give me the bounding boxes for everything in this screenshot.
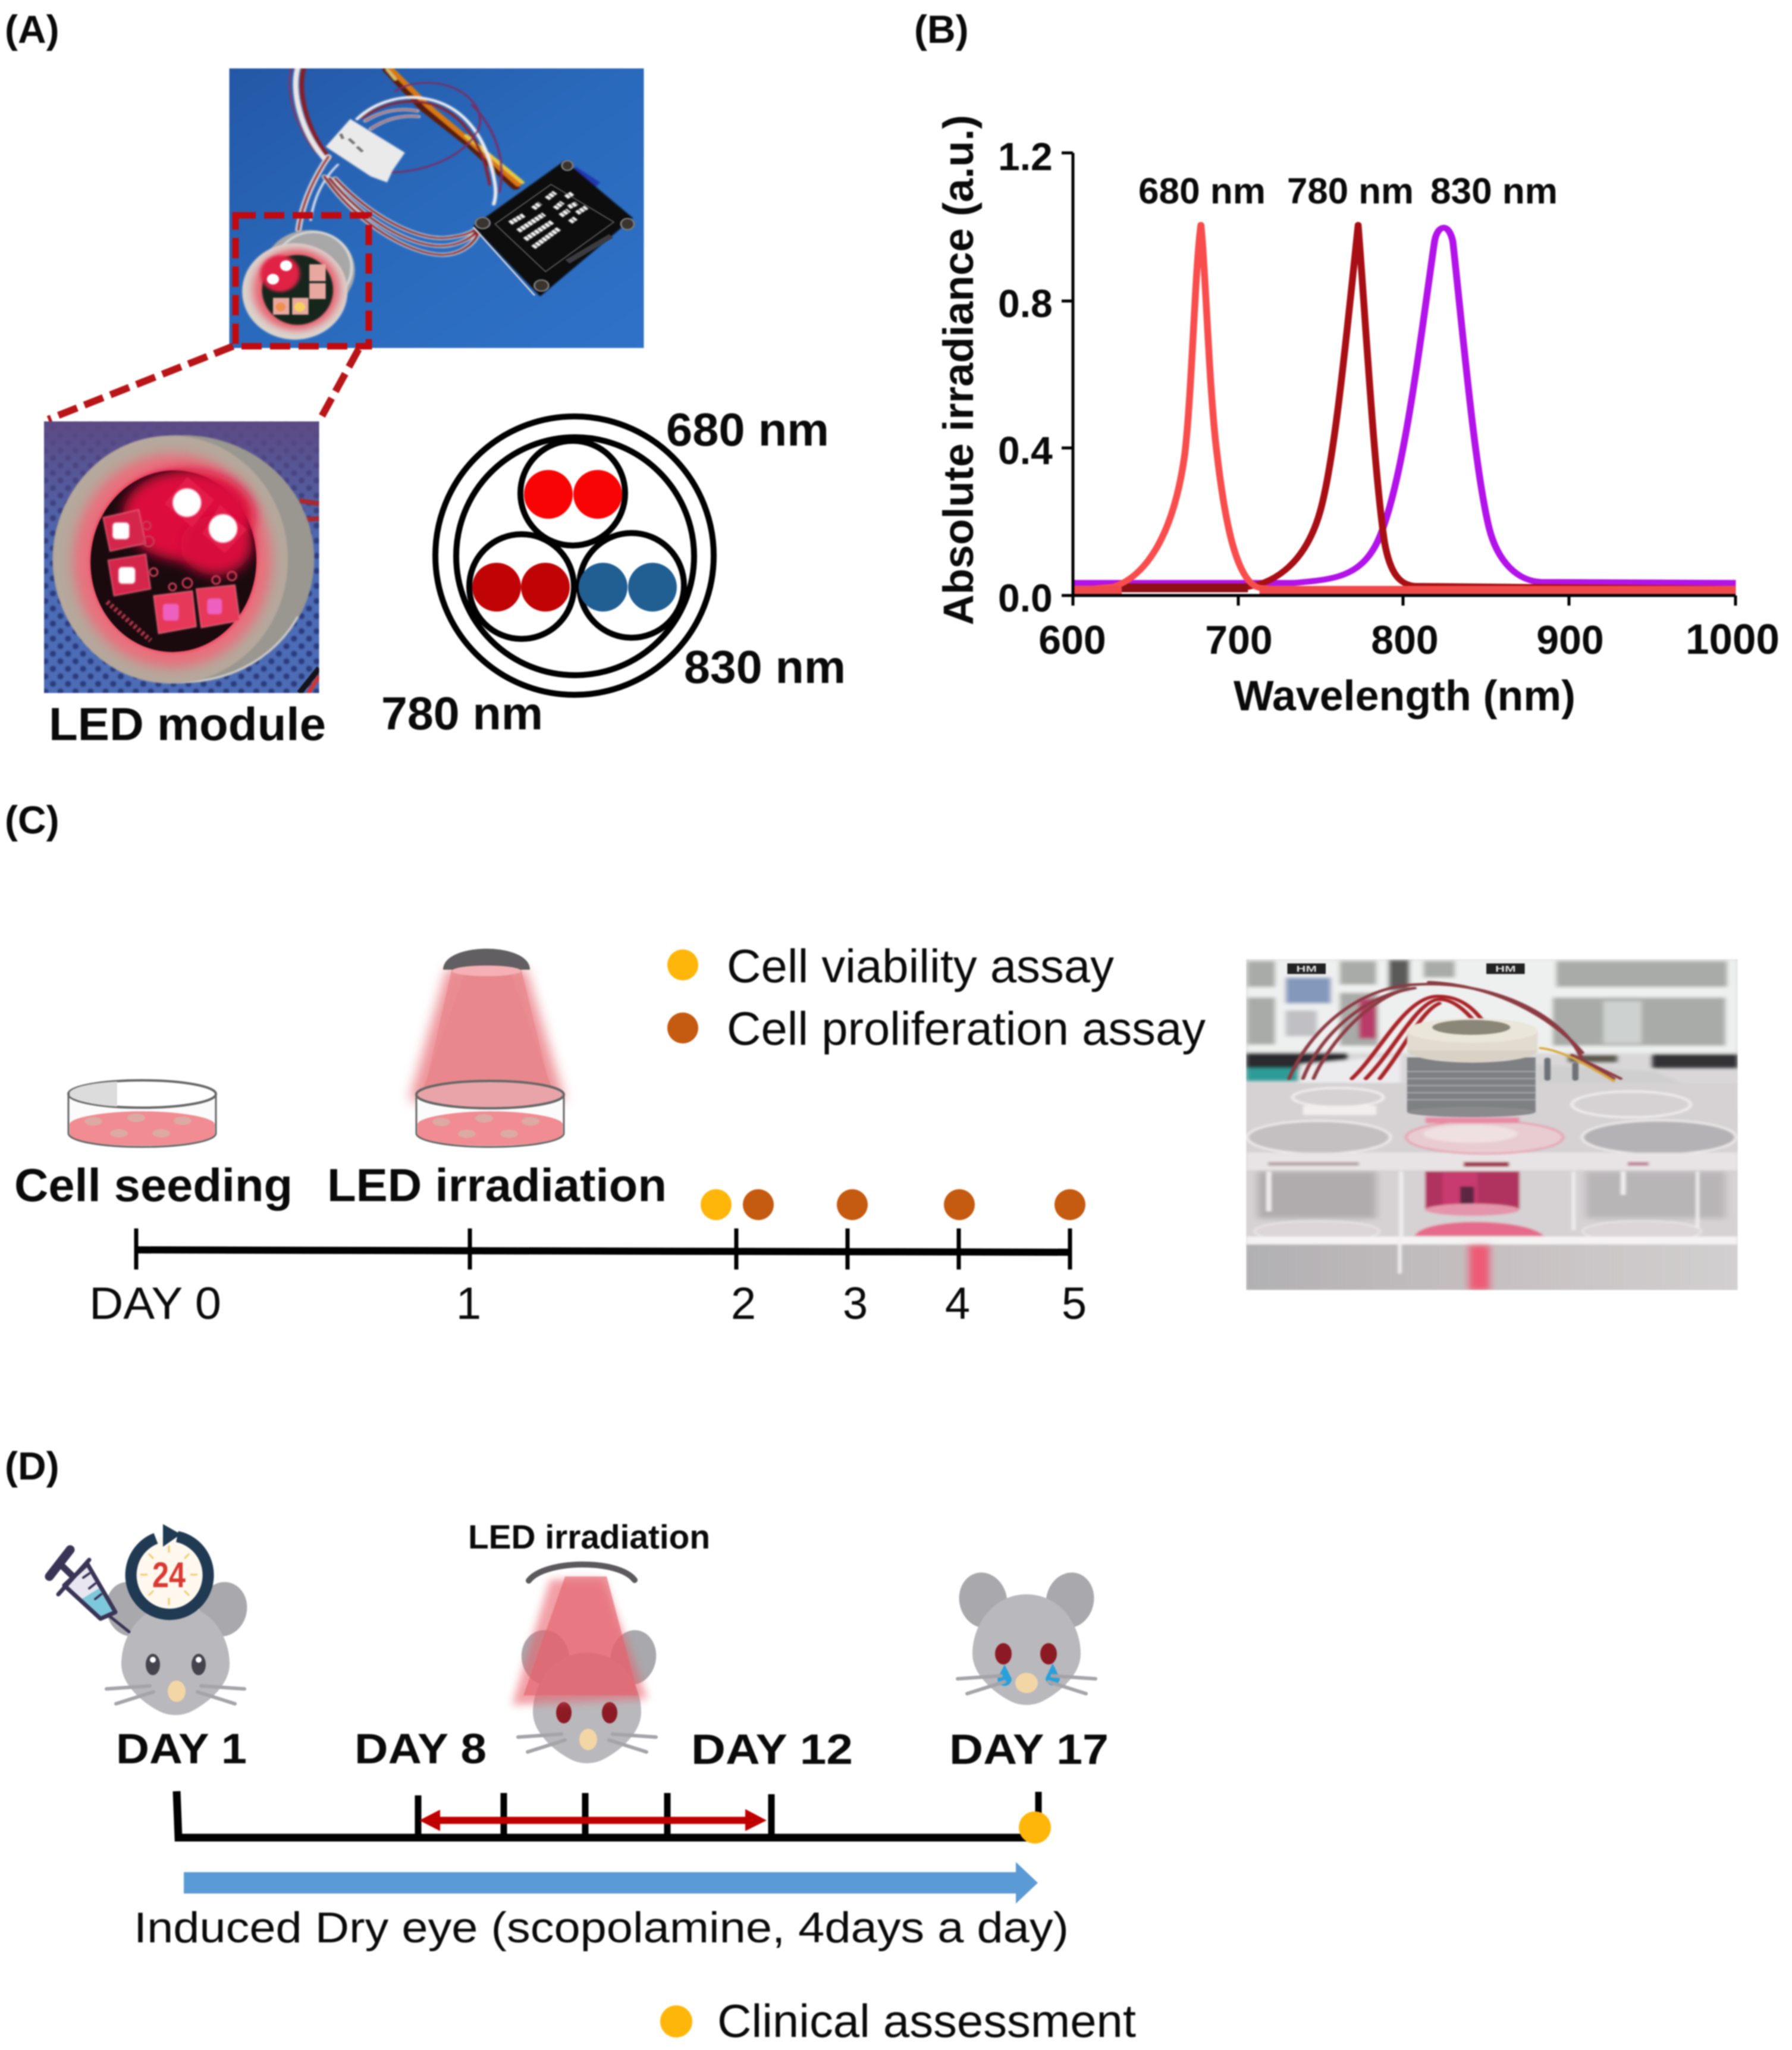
x tick labels: 600 [1038,617,1106,663]
icon: culture dish, cell seeding [68,1080,216,1147]
label: cell seeding: Cell seeding [14,1159,293,1211]
label 680 nm: 680 nm [666,403,829,456]
day labels: DAY 0 [89,1278,221,1329]
day labels: 4 [945,1278,970,1329]
label: DAY 8: DAY 8 [354,1726,487,1773]
icon: culture dish under LED [416,1081,564,1147]
label: DAY 12: DAY 12 [691,1726,853,1773]
timeline [177,1791,1038,1838]
peak label 680 nm: 680 nm [1138,171,1266,211]
blue arrow [184,1862,1038,1904]
photo: device with display [230,68,644,348]
diagram: LED arrangement [435,416,714,695]
icon: syringe [49,1550,129,1632]
caption: LED module: LED module [49,698,326,750]
y axis title: Absolute irradiance (a.u.) [936,115,983,625]
label on photo: HM right: HM [1495,964,1516,974]
x axis title: Wavelength (nm) [1234,673,1576,720]
y tick labels [998,134,1053,620]
day labels: 2 [731,1278,756,1329]
dashed zoom line right [319,349,359,422]
panel A: LED module [5,7,846,750]
label: DAY 1: DAY 1 [116,1726,247,1773]
label: LED irradiation: LED irradiation [468,1518,710,1556]
y tick labels: 0.0 [998,576,1053,620]
icon: LED lamp beam [409,949,565,1101]
panel label C: (C) [5,798,59,842]
panel label B: (B) [914,7,969,51]
caption: induced dry eye: Induced Dry eye (scopolamine, 4days a day) [134,1904,1069,1952]
label: DAY 17: DAY 17 [949,1726,1109,1773]
day labels: 5 [1062,1278,1087,1329]
icon: 24 hour clock [131,1524,208,1615]
x tick labels: 800 [1371,617,1439,663]
icon: mouse with dry eye [953,1568,1100,1705]
peak label 780 nm: 780 nm [1287,171,1414,211]
icon: mouse under LED [512,1565,660,1763]
peak label 830 nm: 830 nm [1430,171,1558,211]
assay markers [701,1189,1085,1220]
label 780 nm: 780 nm [381,687,543,739]
day labels: 1 [456,1278,481,1329]
red double arrow [419,1809,767,1831]
panel label D: (D) [5,1444,59,1488]
timeline [136,1228,1071,1270]
x tick labels: 900 [1536,617,1604,663]
panel D: dry eye mouse experiment [5,1444,1136,2047]
label 830 nm: 830 nm [684,641,846,693]
clinical assessment marker [1019,1811,1051,1844]
photo: LED module close-up [44,421,319,693]
icon: 24 hour clock: 24 [152,1555,186,1595]
day labels [89,1278,1087,1329]
x tick labels: 700 [1205,617,1273,663]
panel label A: (A) [5,7,59,51]
x tick labels: 1000 [1686,616,1780,663]
legend: cell viability: Cell viability assay [727,939,1114,992]
icon: mouse day 1 [101,1577,253,1715]
y tick labels: 0.8 [998,281,1053,325]
label on photo: HM left [1287,964,1326,974]
dashed highlight box [236,215,369,346]
day labels: 3 [843,1278,868,1329]
legend: clinical assessment: Clinical assessment [717,1995,1136,2047]
spectral curves [1073,225,1736,590]
panel C: cell experiment [5,798,1738,1329]
panel B: spectrum chart [914,7,1780,720]
label on photo: HM right [1486,964,1525,974]
photo: LED over culture plate [1246,959,1738,1290]
legend: cell proliferation: Cell proliferation assay [727,1002,1206,1055]
y tick labels: 0.4 [998,428,1053,472]
dashed zoom line left [48,346,233,419]
y tick labels: 1.2 [998,134,1053,178]
axes [1062,153,1735,606]
label on photo: HM left: HM [1296,964,1317,974]
x tick labels [1038,616,1780,663]
label: LED irradiation: LED irradiation [327,1159,667,1211]
